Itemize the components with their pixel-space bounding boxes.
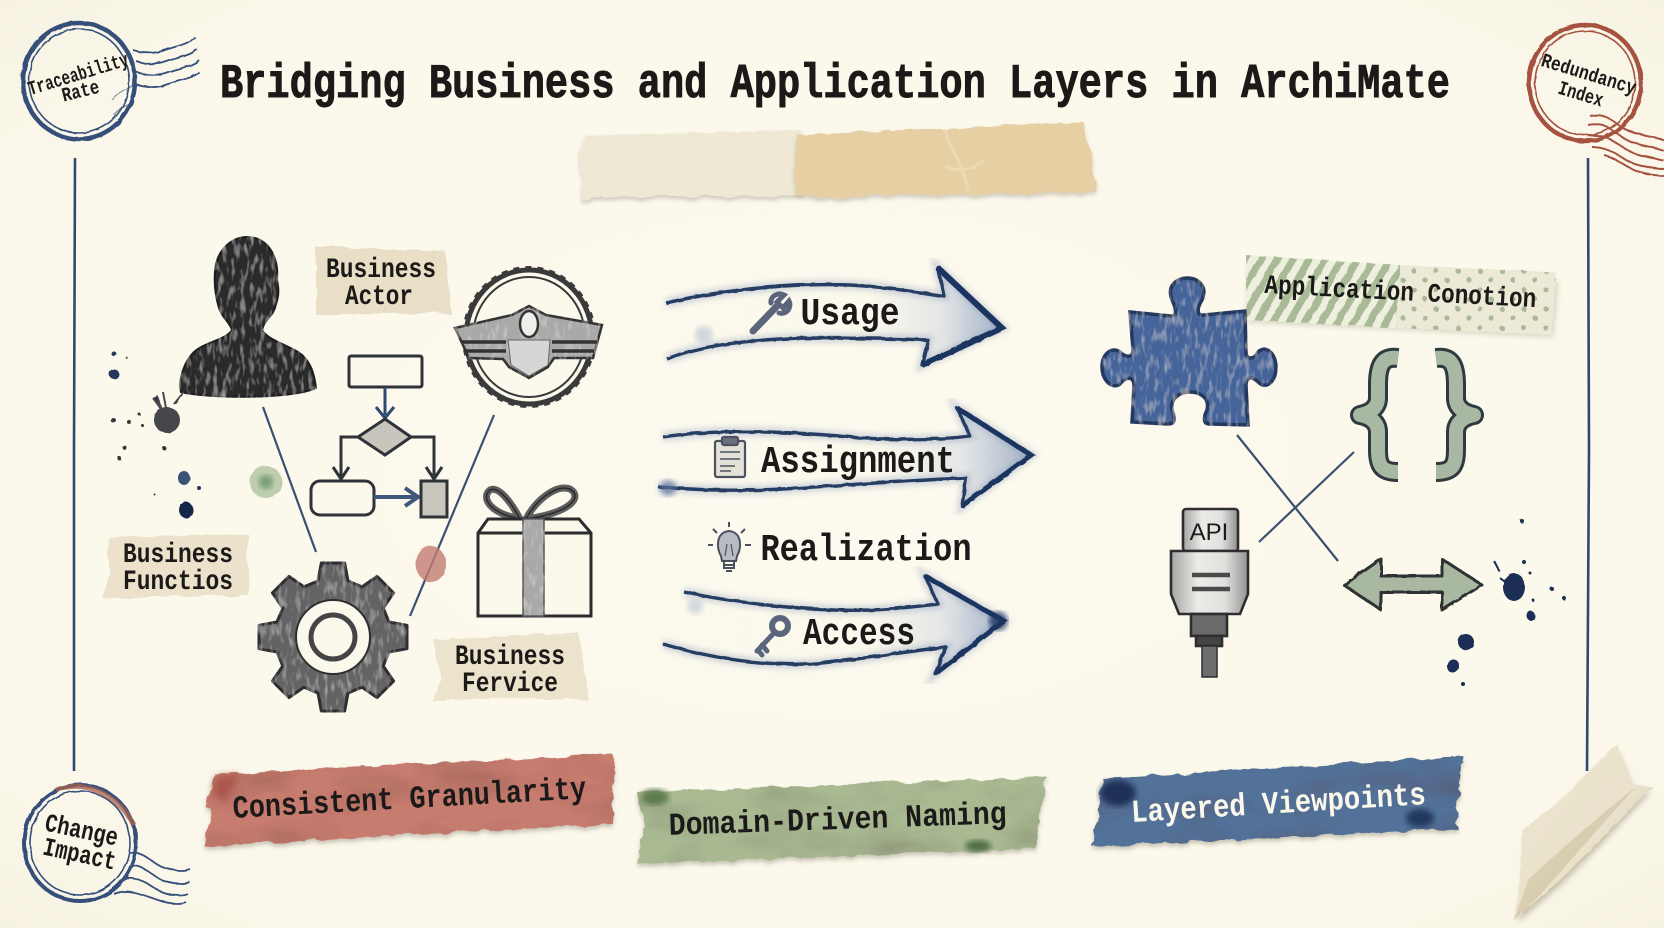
ink splatter: right (1447, 519, 1566, 686)
right brace (1436, 358, 1474, 472)
arrow: access: Access (803, 613, 915, 656)
watercolor spot: red (416, 546, 446, 582)
stamp: redundancy index: Index (1555, 78, 1606, 113)
stamp: redundancy index (1529, 25, 1664, 176)
tape: layered viewpoints (1092, 756, 1463, 847)
folded tape corner (1514, 744, 1653, 922)
connector: actor to gear (263, 407, 316, 552)
left vertical rule (74, 158, 75, 771)
icon: curly braces (1360, 358, 1474, 472)
arrow: assignment: Assignment (761, 441, 955, 484)
label: business actor (315, 247, 451, 315)
label: application conotion (1246, 255, 1558, 337)
icon: light bulb (708, 522, 751, 571)
icon: business actor person (180, 237, 316, 397)
arrow: usage (666, 268, 1002, 365)
connector: badge to gear (410, 415, 494, 616)
tape: domain-driven naming (637, 777, 1048, 864)
icon: puzzle piece (1102, 278, 1276, 425)
tape: consistent granularity: Consistent Granularity (232, 771, 587, 828)
tape: layered viewpoints: Layered Viewpoints (1130, 777, 1427, 832)
right vertical rule (1587, 158, 1589, 771)
top cream tape (579, 130, 803, 200)
ink splatter: upper left (109, 352, 201, 518)
label: business service: Business (455, 642, 565, 673)
watercolor spot: green (250, 466, 282, 498)
stamp: redundancy index: Redundancy (1538, 50, 1639, 101)
icon: gear (259, 563, 407, 711)
top tan tape (794, 122, 1097, 198)
label: business actor: Actor (345, 282, 413, 313)
icon: gift box (478, 488, 591, 616)
label: realization: Realization (760, 529, 972, 572)
tape: consistent granularity (204, 754, 613, 846)
arrow: usage: Usage (800, 293, 900, 336)
icon: key (757, 618, 788, 655)
icon: winged badge (455, 268, 602, 406)
stamp: traceability rate: Traceability (26, 49, 132, 102)
stamp: traceability rate: Rate (60, 77, 102, 108)
label: business function (103, 534, 250, 599)
label: business function: Functios (123, 567, 233, 598)
left brace (1360, 358, 1398, 472)
label: business service: Fervice (462, 669, 558, 700)
stamp: change impact (24, 785, 190, 903)
stamp: change impact: Change (42, 809, 121, 854)
icon: wrench (753, 294, 790, 331)
tape: domain-driven naming: Domain-Driven Naming (668, 796, 1007, 845)
icon: clipboard (715, 437, 745, 477)
label: api: API (1190, 519, 1228, 546)
connector: api to braces (1259, 452, 1354, 542)
arrow: assignment (658, 408, 1031, 506)
stamp: traceability rate (23, 23, 199, 139)
icon: flowchart (311, 356, 447, 517)
icon: api plug (1171, 509, 1248, 677)
label: application conotion: Application Conotion (1264, 272, 1537, 316)
stamp: change impact: Impact (40, 833, 119, 878)
label: business function: Business (123, 540, 233, 571)
label: business actor: Business (326, 255, 436, 286)
icon: double arrow (1344, 559, 1482, 610)
label: business service (431, 632, 589, 701)
arrow: access (663, 576, 1007, 674)
connector: puzzle to double arrow (1237, 435, 1338, 561)
